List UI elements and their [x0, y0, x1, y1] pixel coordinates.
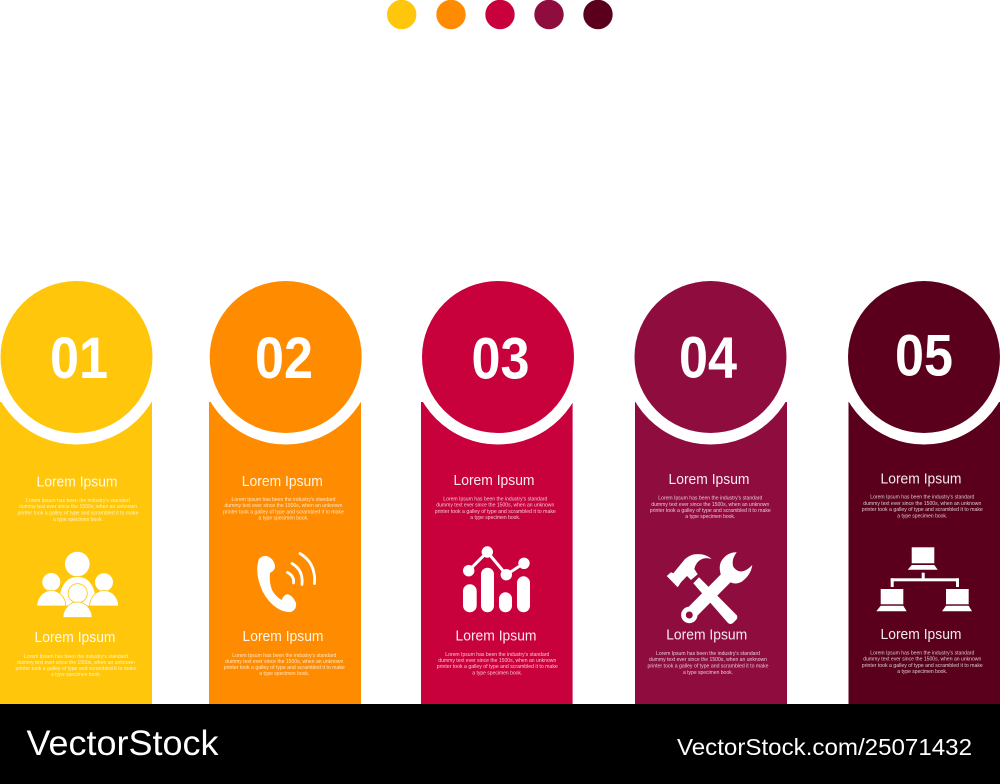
text block 05 bottom: dummy text ever since the 1500s, when an unknown [863, 656, 982, 662]
text block 05 top: a type specimen book. [897, 514, 947, 520]
text block 03 top: Lorem Ipsum has been the industry's standard [443, 496, 548, 502]
icon: network of laptops [876, 547, 972, 611]
text block 05 top [862, 494, 983, 520]
number 03: 03 [472, 327, 530, 392]
text block 01 top [18, 498, 139, 523]
text block 04 top: printer took a galley of type and scrambled it to make [650, 508, 771, 514]
text block 03 bottom: Lorem Ipsum has been the industry's standard [445, 652, 550, 658]
text block 01 bottom: a type specimen book. [51, 672, 101, 678]
heading 01 bottom: Lorem Ipsum [34, 630, 116, 646]
text block 04 bottom: Lorem Ipsum has been the industry's standard [656, 651, 760, 657]
text block 01 top: printer took a galley of type and scrambled it to make [18, 510, 139, 516]
text block 05 bottom [862, 650, 983, 675]
text block 03 bottom: printer took a galley of type and scrambled it to make [437, 664, 558, 670]
number 04: 04 [679, 325, 737, 390]
text block 04 top: a type specimen book. [685, 514, 735, 520]
text block 02 top: Lorem Ipsum has been the industry's standard [232, 497, 336, 503]
text block 02 bottom: a type specimen book. [259, 671, 309, 677]
heading 05 bottom: Lorem Ipsum [880, 627, 962, 643]
text block 05 top: printer took a galley of type and scrambled it to make [862, 507, 983, 513]
panel: step 01 [0, 270, 164, 704]
heading 05 top: Lorem Ipsum [880, 471, 962, 487]
panel: step 04 [623, 270, 798, 704]
text block 02 bottom [224, 653, 345, 677]
text block 03 bottom: dummy text ever since the 1500s, when an unknown [438, 658, 557, 664]
text block 04 bottom [648, 651, 769, 676]
text block 03 top [435, 496, 556, 521]
text block 02 top: a type specimen book. [258, 516, 308, 522]
text block 03 top: a type specimen book. [470, 515, 520, 521]
text block 02 bottom: printer took a galley of type and scrambled it to make [224, 665, 345, 671]
text block 05 bottom: printer took a galley of type and scrambled it to make [862, 663, 983, 669]
icon: hammer and wrench [667, 552, 752, 624]
text block 01 bottom: printer took a galley of type and scrambled it to make [16, 666, 137, 672]
text block 03 top: dummy text ever since the 1500s, when an unknown [436, 502, 555, 508]
icon: chart [463, 546, 530, 612]
footer bar [0, 704, 1000, 784]
heading 02 top: Lorem Ipsum [242, 474, 323, 490]
text block 04 bottom: dummy text ever since the 1500s, when an unknown [649, 657, 767, 663]
heading 04 top: Lorem Ipsum [668, 472, 750, 488]
panel: step 03 [410, 270, 586, 704]
text block 02 bottom: dummy text ever since the 1500s, when an unknown [225, 659, 344, 665]
panel: step 05 [836, 270, 1000, 704]
text block 04 top: Lorem Ipsum has been the industry's standard [658, 496, 763, 502]
heading 04 bottom: Lorem Ipsum [666, 628, 747, 644]
text block 01 top: dummy text ever since the 1500s, when an unknown [19, 504, 137, 510]
text block 01 bottom: Lorem Ipsum has been the industry's standard [24, 654, 128, 660]
text block 04 top [650, 496, 771, 520]
footer image id: VectorStock.com/25071432 [677, 734, 972, 760]
number 01: 01 [50, 326, 108, 391]
text block 01 bottom: dummy text ever since the 1500s, when an unknown [17, 660, 135, 666]
heading 03 bottom: Lorem Ipsum [456, 628, 536, 644]
number 02: 02 [255, 326, 313, 391]
icon: people [37, 551, 118, 618]
text block 04 bottom: a type specimen book. [683, 670, 733, 676]
text block 05 top: Lorem Ipsum has been the industry's standard [870, 494, 975, 500]
text block 02 top [223, 497, 344, 522]
text block 05 top: dummy text ever since the 1500s, when an unknown [863, 501, 982, 507]
colour palette dots [387, 0, 613, 29]
text block 03 top: printer took a galley of type and scrambled it to make [435, 509, 556, 515]
panel: step 02 [198, 270, 373, 704]
text block 04 bottom: printer took a galley of type and scrambled it to make [648, 664, 769, 670]
icon: phone [257, 554, 315, 612]
text block 02 top: dummy text ever since the 1500s, when an unknown [224, 503, 343, 509]
text block 01 top: a type specimen book. [53, 517, 103, 523]
heading 02 bottom: Lorem Ipsum [242, 629, 324, 645]
text block 02 top: printer took a galley of type and scrambled it to make [223, 510, 344, 516]
heading 03 top: Lorem Ipsum [454, 473, 534, 489]
text block 01 top: Lorem Ipsum has been the industry's standard [26, 498, 130, 504]
text block 05 bottom: a type specimen book. [897, 669, 947, 675]
number 05: 05 [895, 324, 953, 389]
text block 01 bottom [16, 654, 137, 678]
text block 04 top: dummy text ever since the 1500s, when an unknown [651, 502, 770, 508]
text block 03 bottom [437, 652, 558, 676]
footer brand: VectorStock [26, 724, 219, 763]
text block 03 bottom: a type specimen book. [472, 670, 522, 676]
text block 02 bottom: Lorem Ipsum has been the industry's standard [232, 653, 337, 659]
heading 01 top: Lorem Ipsum [36, 475, 118, 491]
text block 05 bottom: Lorem Ipsum has been the industry's standard [870, 650, 975, 656]
